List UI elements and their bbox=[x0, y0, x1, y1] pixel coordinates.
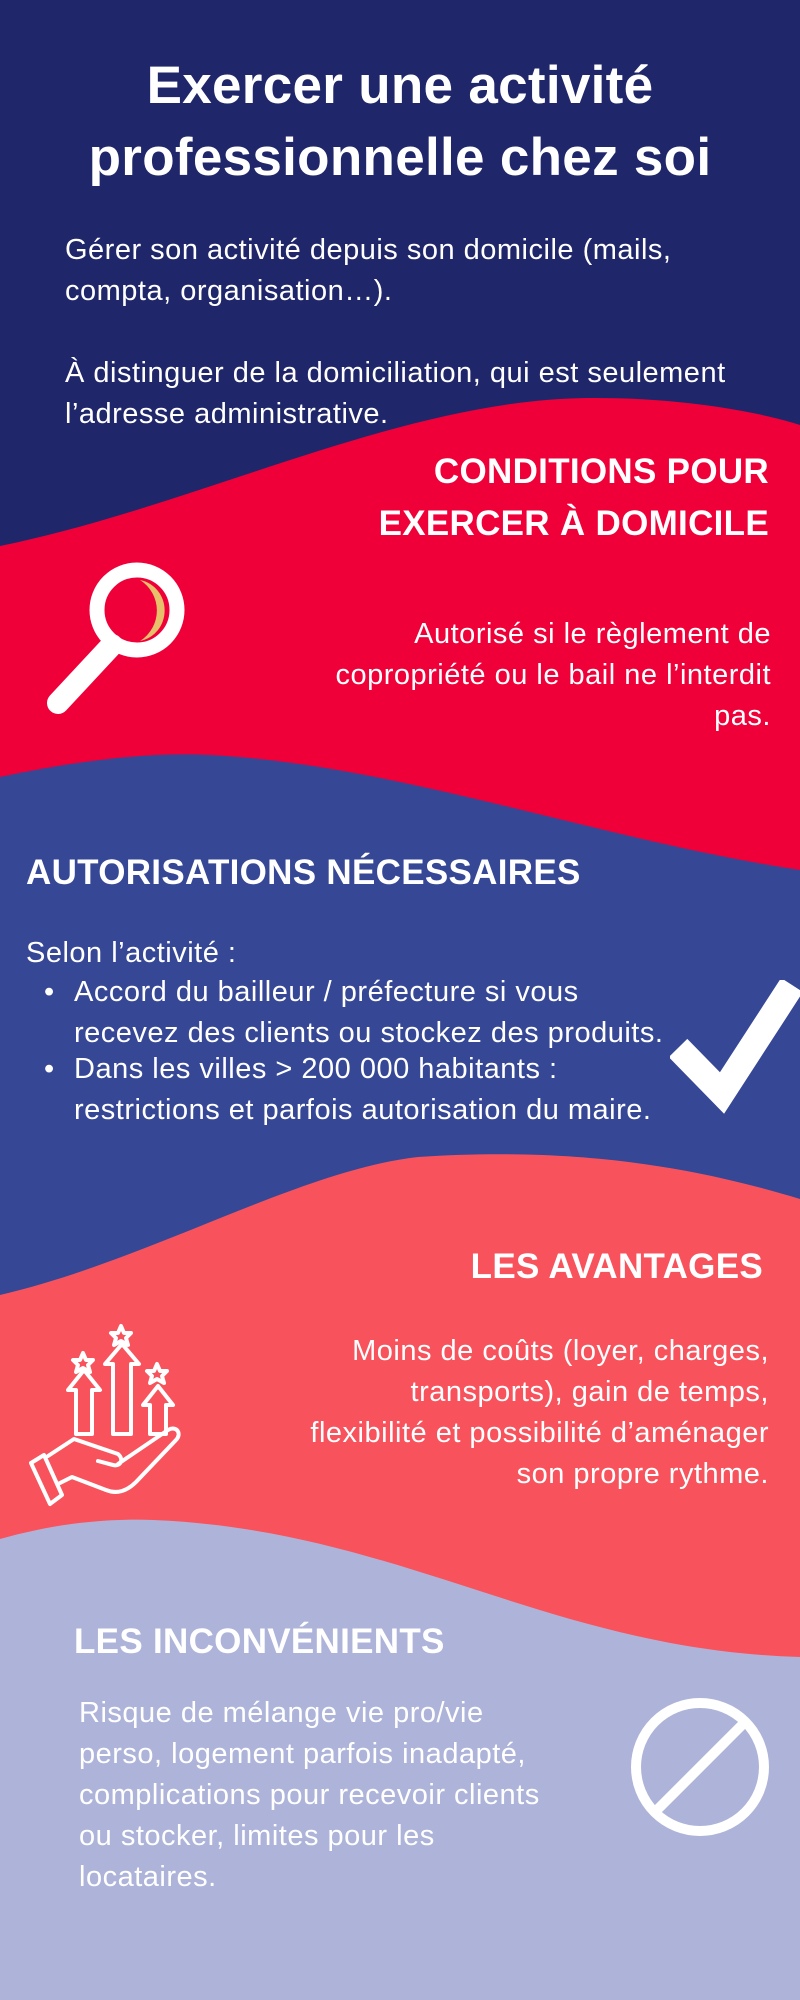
text: inconvénients: locataires. bbox=[79, 1861, 217, 1893]
intro text: l’adresse administrative. bbox=[65, 398, 389, 430]
heading: conditions bbox=[379, 452, 769, 543]
title: Exercer une activité bbox=[147, 56, 653, 115]
title: professionnelle chez soi bbox=[89, 128, 711, 187]
text: avantages bbox=[310, 1335, 769, 1490]
icon: prohibited sign bbox=[631, 1698, 769, 1836]
heading: conditions: EXERCER À DOMICILE bbox=[379, 504, 769, 543]
intro text bbox=[65, 234, 726, 430]
icon: magnifying glass bbox=[47, 562, 184, 714]
heading: conditions: CONDITIONS POUR bbox=[434, 452, 769, 491]
icon: hand with arrows and stars bbox=[28, 1324, 181, 1506]
text: autorisations list: restrictions et parfois autorisation du maire. bbox=[74, 1094, 651, 1126]
text: avantages: son propre rythme. bbox=[517, 1458, 769, 1490]
icon: checkmark bbox=[670, 980, 800, 1114]
heading: inconvénients: LES INCONVÉNIENTS bbox=[74, 1622, 445, 1661]
text: inconvénients: ou stocker, limites pour les bbox=[79, 1820, 435, 1852]
text: autorisations list: Accord du bailleur / préfecture si vous bbox=[74, 976, 579, 1008]
text: autorisations list bbox=[26, 937, 663, 1126]
text: inconvénients: perso, logement parfois inadapté, bbox=[79, 1738, 526, 1770]
intro text: Gérer son activité depuis son domicile (mails, bbox=[65, 234, 671, 266]
text: autorisations list: recevez des clients ou stockez des produits. bbox=[74, 1017, 663, 1049]
intro text: À distinguer de la domiciliation, qui est seulement bbox=[65, 357, 726, 389]
text: inconvénients: complications pour recevoir clients bbox=[79, 1779, 540, 1811]
text: avantages: Moins de coûts (loyer, charges, bbox=[352, 1335, 769, 1367]
text: autorisations list: • bbox=[44, 1053, 55, 1085]
title bbox=[89, 56, 711, 187]
text: conditions: Autorisé si le règlement de bbox=[414, 618, 771, 650]
text: avantages: transports), gain de temps, bbox=[411, 1376, 769, 1408]
text: inconvénients: Risque de mélange vie pro/vie bbox=[79, 1697, 484, 1729]
text: conditions: copropriété ou le bail ne l’interdit bbox=[335, 659, 771, 691]
text: inconvénients bbox=[79, 1697, 540, 1893]
text: conditions bbox=[335, 618, 771, 732]
intro text: compta, organisation…). bbox=[65, 275, 392, 307]
text: autorisations list: Selon l’activité : bbox=[26, 937, 236, 969]
heading: autorisations: AUTORISATIONS NÉCESSAIRES bbox=[26, 853, 581, 892]
heading: avantages: LES AVANTAGES bbox=[471, 1247, 763, 1286]
text: conditions: pas. bbox=[714, 700, 771, 732]
text: autorisations list: Dans les villes > 200 000 habitants : bbox=[74, 1053, 558, 1085]
text: avantages: flexibilité et possibilité d’aménager bbox=[310, 1417, 769, 1449]
text: autorisations list: • bbox=[44, 976, 55, 1008]
